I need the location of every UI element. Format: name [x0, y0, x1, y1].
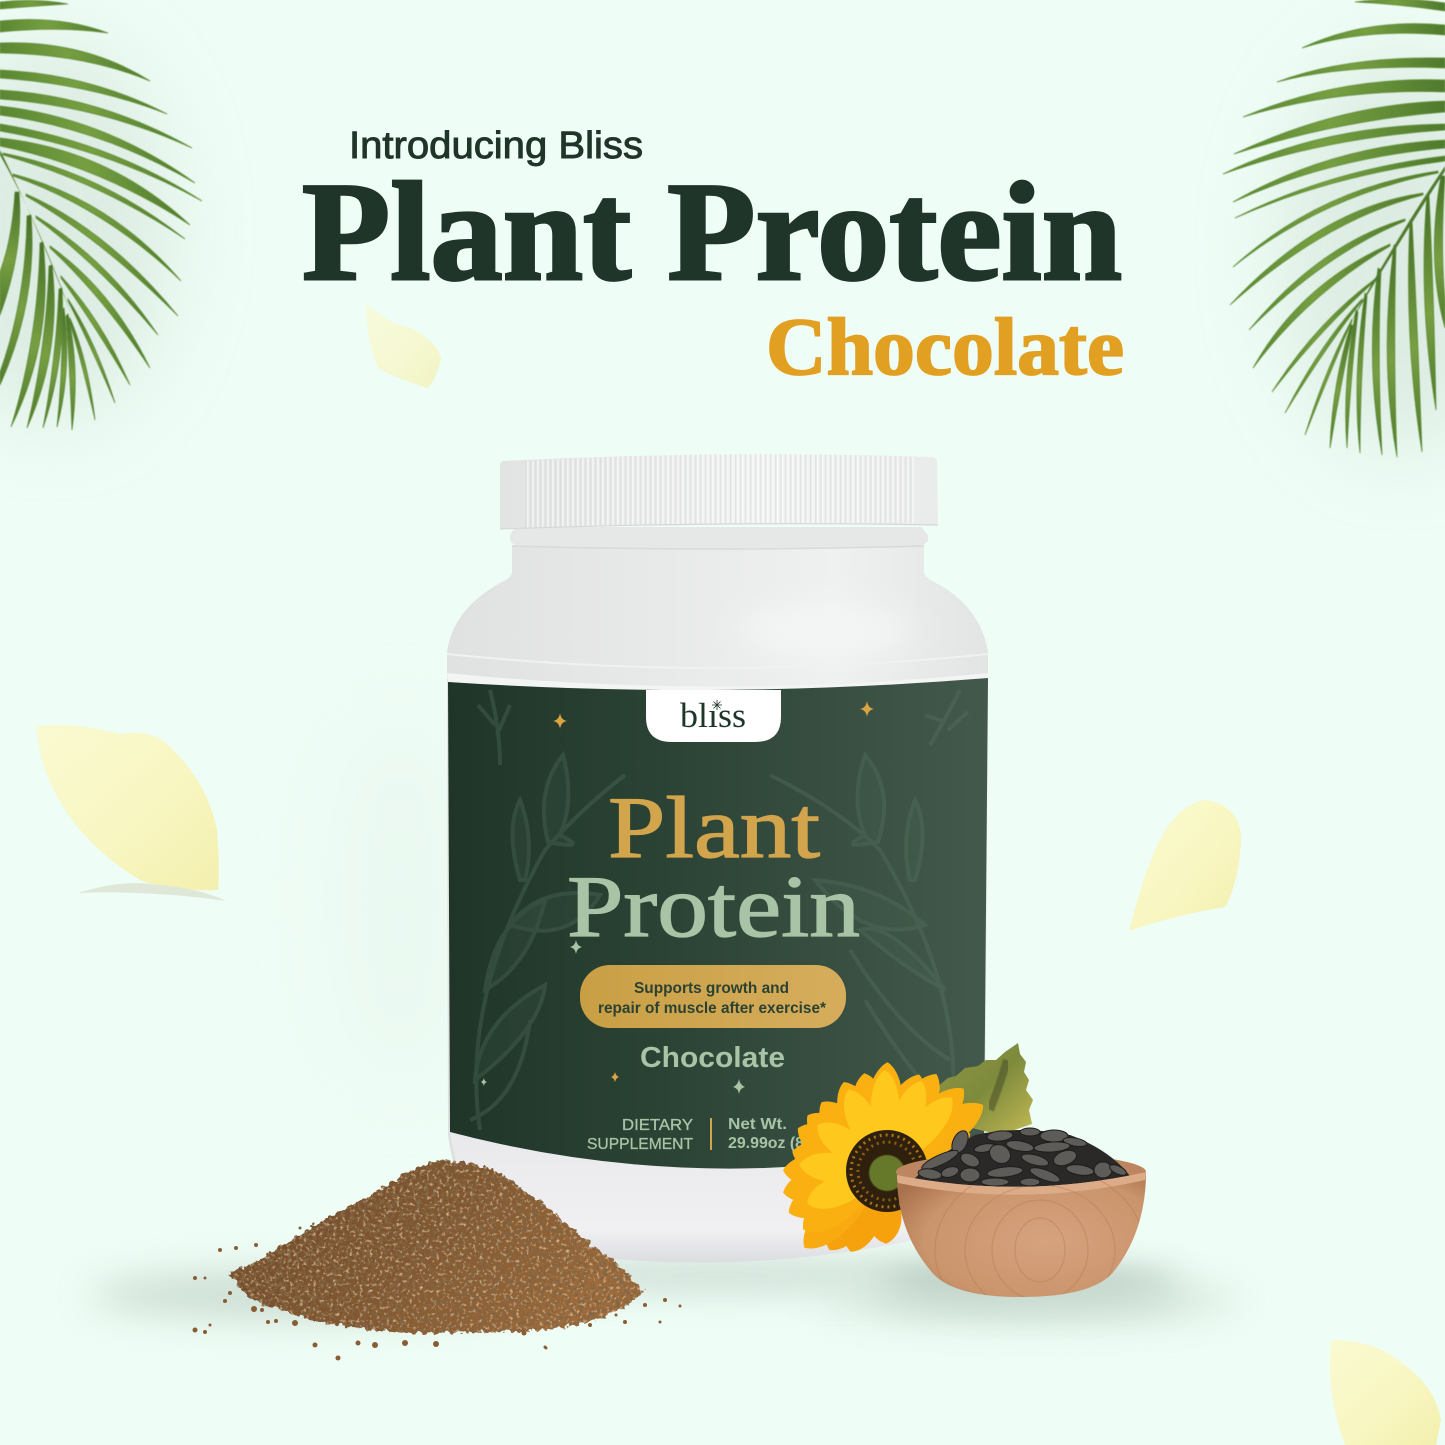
- label foliage: [470, 690, 968, 1130]
- jar shoulder groove: [447, 654, 988, 668]
- floor shadows: [90, 1263, 1240, 1324]
- jar shoulder highlight: [735, 602, 915, 658]
- icon: palm frond top right: [1223, 0, 1445, 457]
- jar body: [447, 545, 988, 1262]
- icon: petal bottom right: [1330, 1340, 1441, 1445]
- claim text line 1: Supports growth and: [634, 980, 789, 997]
- rachis left: [0, 150, 72, 316]
- jar: [447, 454, 988, 1262]
- sunflower: [779, 1061, 993, 1260]
- flower disc: [846, 1130, 928, 1212]
- net weight text: [728, 1116, 804, 1152]
- icon: palm frond top left: [0, 0, 202, 430]
- powder pile: [192, 1160, 682, 1360]
- icon: large petal left: [36, 725, 226, 901]
- upper leaflets right: [1223, 0, 1445, 435]
- heading flavour: Chocolate: [766, 301, 1124, 392]
- palm shadow right: [1280, 50, 1445, 450]
- rachis right: [1349, 166, 1445, 325]
- seed pieces: [917, 1128, 1128, 1186]
- label divider: [710, 1118, 712, 1150]
- lower leaflets right: [1330, 176, 1445, 457]
- palm shadow left: [0, 40, 170, 420]
- cap ribs: [525, 454, 915, 528]
- dietary supplement text: [587, 1117, 693, 1153]
- pile mound: [228, 1160, 643, 1333]
- icon: petal near heading: [366, 303, 441, 388]
- bowl inner rim: [896, 1153, 1146, 1191]
- flower disc ring: [851, 1135, 923, 1207]
- label sparkles: [481, 701, 874, 1094]
- jar bottom band: [450, 1132, 984, 1262]
- sunflower leaf: [937, 1043, 1033, 1135]
- claim pill: [580, 965, 846, 1028]
- logo tab: [646, 690, 781, 742]
- label background: [448, 678, 988, 1169]
- bowl rim light: [897, 1172, 1146, 1195]
- dietary supplement text: DIETARY: [622, 1117, 693, 1134]
- seeds: [915, 1128, 1130, 1192]
- heading intro: Introducing Bliss: [349, 125, 643, 167]
- jar soft back shadow: [340, 720, 460, 1080]
- icon: petal right: [1129, 800, 1241, 931]
- lower leaflets left: [0, 192, 115, 430]
- net weight text: 29.99oz (8: [728, 1135, 804, 1152]
- foliage leaves: [475, 755, 945, 1080]
- flavour text: Chocolate: [640, 1042, 785, 1074]
- back petals: [779, 1061, 993, 1260]
- cap lower edge: [500, 524, 938, 529]
- logo star: [712, 700, 722, 710]
- heading main: Plant Protein: [302, 154, 1122, 310]
- label title Protein: Protein: [567, 859, 860, 956]
- foliage stems: [470, 690, 968, 1130]
- powder specks: [192, 1226, 682, 1360]
- jar neck groove: [512, 546, 924, 549]
- bowl of seeds: [896, 1128, 1146, 1297]
- bowl body: [897, 1172, 1146, 1297]
- jar cap: [500, 454, 938, 529]
- net weight text: Net Wt.: [728, 1116, 787, 1133]
- logo text: blıss: [680, 696, 746, 735]
- bowl wood grain: [934, 1180, 1140, 1297]
- label title Plant: Plant: [608, 780, 820, 877]
- seed mound: [915, 1130, 1130, 1192]
- jar shoulder ring: [447, 673, 988, 690]
- front petals: [798, 1070, 963, 1217]
- jar label: [448, 678, 988, 1169]
- claim text line 2: repair of muscle after exercise*: [598, 1000, 827, 1017]
- jar neck ring: [510, 527, 928, 548]
- dietary supplement text: SUPPLEMENT: [587, 1136, 693, 1153]
- upper leaflets left: [0, 0, 202, 385]
- leaf vein: [990, 1060, 1007, 1110]
- flower centre: [869, 1155, 905, 1191]
